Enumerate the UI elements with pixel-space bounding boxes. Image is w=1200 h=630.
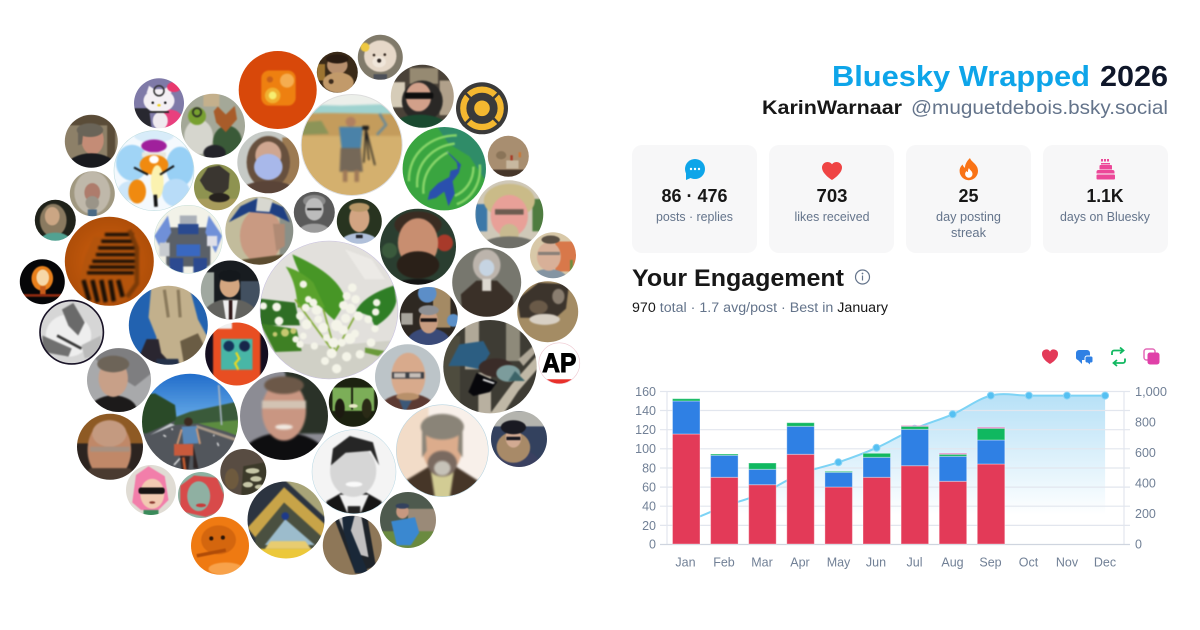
bar: May: [825, 471, 852, 544]
stats cards: [632, 145, 1168, 253]
month labels: Apr: [790, 556, 810, 570]
avatar: cat nose selfie: [316, 52, 358, 93]
avatar: man in kilt with tripod: [300, 94, 403, 196]
left axis labels: 60: [642, 480, 656, 494]
avatar: black and white bird: [39, 300, 104, 365]
month labels: [675, 556, 1116, 570]
avatar: pink-haired cartoon: [126, 465, 176, 515]
card: posts and replies: posts · replies: [656, 210, 733, 224]
avatar: AP logo: [535, 339, 584, 390]
card: likes received: 703: [816, 186, 848, 206]
avatar: crowned fox: [114, 130, 194, 211]
card: likes received: [769, 145, 894, 253]
avatar: man with orange bookshelf: [530, 232, 576, 278]
month labels: Dec: [1094, 556, 1116, 570]
bar: Sep: [977, 427, 1005, 544]
avatar: man with grey sky: [87, 348, 151, 412]
avatar: man with blue shirt in garden: [374, 486, 442, 554]
month labels: Oct: [1019, 556, 1039, 570]
right axis labels: 600: [1135, 446, 1156, 460]
heading: Your Engagement: Your Engagement: [632, 265, 844, 292]
card: day posting streak: 25: [958, 186, 978, 206]
right axis labels: 400: [1135, 477, 1156, 491]
avatar: woman with black glasses: [390, 64, 454, 128]
avatar: AP logo: AP: [542, 348, 576, 378]
handle: @muguetdebois.bsky.social: [911, 97, 1168, 119]
card: days on Bluesky: [1043, 145, 1168, 253]
avatar: curly-haired man: [475, 180, 544, 248]
avatar: black and white man in suit: [304, 421, 404, 522]
avatar: blue robot: [154, 205, 222, 274]
avatar: bearded man in tweed: [387, 396, 498, 506]
title year: 2026: [1100, 61, 1168, 93]
card: days on Bluesky: days on Bluesky: [1060, 210, 1151, 224]
card: days on Bluesky: 1.1K: [1086, 186, 1124, 206]
avatar: fantail bird: [194, 164, 240, 210]
bar: Aug: [939, 453, 967, 544]
avatar: explosion: [20, 259, 65, 304]
right axis labels: 1,000: [1135, 385, 1167, 399]
month labels: Jun: [866, 556, 886, 570]
avatar: orange cat: [191, 516, 249, 575]
stacked bars: [672, 399, 1005, 544]
avatar: woman on bike: [142, 374, 238, 470]
avatar: long-haired man: [70, 171, 115, 216]
avatar: dark tie: [317, 510, 388, 581]
icon: quotes: [1144, 349, 1160, 364]
display name: KarinWarnaar: [762, 98, 903, 119]
left axis labels: 40: [642, 500, 656, 514]
month labels: Mar: [751, 556, 773, 570]
card: posts and replies: [632, 145, 757, 253]
left axis labels: 0: [649, 538, 656, 552]
avatar: man in black fleece: [240, 372, 328, 460]
avatar: grayscale woman: [294, 192, 335, 233]
avatar: yellow ring logo: [456, 82, 508, 134]
left axis labels: 100: [635, 442, 656, 456]
month labels: May: [827, 556, 851, 570]
cumulative area: [686, 394, 1105, 544]
bar: Jun: [863, 453, 890, 544]
avatar: bearded man painting: [380, 208, 456, 285]
avatar: grey-haired man: [64, 114, 118, 168]
avatar: pottery glaze: [248, 482, 324, 558]
icon: chat bubble: [685, 159, 705, 180]
left axis labels: 160: [635, 385, 656, 399]
cumulative line: [686, 394, 1105, 521]
card: posts and replies: 86 · 476: [662, 186, 728, 206]
avatar: balding man with glasses: [77, 414, 143, 480]
avatar: brown wall art: [488, 136, 529, 177]
icon: reposts: [1112, 348, 1125, 366]
bar: Feb: [711, 454, 738, 544]
header: title: [762, 61, 1168, 119]
month labels: Feb: [713, 556, 735, 570]
avatar: woman in hat: [485, 405, 553, 482]
month labels: Aug: [941, 556, 964, 570]
avatar: fluffy cat: [511, 275, 584, 348]
avatar: man in light blue shirt: [336, 198, 382, 244]
bar: Jul: [901, 426, 929, 544]
icon: replies: [1076, 350, 1093, 366]
legend icons: [1042, 348, 1160, 366]
avatar: gothic church: [128, 286, 208, 365]
left axis labels: 20: [642, 519, 656, 533]
card: day posting streak: day posting: [936, 210, 1001, 224]
avatar: person in suit and tie: [200, 260, 260, 320]
avatar: orange app icon: [238, 51, 317, 129]
avatar: masked painted figure: [445, 241, 528, 324]
month labels: Jul: [907, 556, 922, 570]
card: likes received: likes received: [794, 210, 870, 224]
combo chart: monthly engagement: [635, 385, 1167, 570]
right axis labels: 800: [1135, 416, 1156, 430]
avatar: pop art portrait: [178, 472, 224, 518]
engagement summary: 970 total · 1.7 avg/post · Best in January: [632, 300, 888, 315]
line points: [835, 392, 1109, 466]
card: day posting streak: [906, 145, 1031, 253]
avatar: bald man with rectangular glasses: [368, 338, 447, 426]
avatar: man with glass orb: [394, 281, 464, 357]
month labels: Sep: [979, 556, 1002, 570]
avatar: green wind map: [402, 127, 486, 210]
bar: Jan: [672, 399, 700, 544]
avatar: orange poster: [205, 322, 268, 386]
icon: birthday cake: [1096, 159, 1115, 180]
icon: info: [856, 270, 870, 284]
bar: Mar: [749, 463, 776, 544]
title text: Bluesky Wrapped: [832, 61, 1090, 93]
right axis labels: 200: [1135, 507, 1156, 521]
left axis labels: [635, 385, 656, 552]
avatar: fluffy white dog: [358, 34, 403, 80]
avatar: tui bird: [440, 316, 540, 416]
right axis labels: [1135, 385, 1167, 552]
left axis labels: 120: [635, 423, 656, 437]
icon: heart: [822, 162, 842, 180]
right axis labels: 0: [1135, 538, 1142, 552]
icon: likes heart: [1042, 349, 1058, 364]
left axis labels: 140: [635, 404, 656, 418]
avatar: muppets: [181, 94, 245, 158]
avatar cloud: [15, 30, 584, 581]
avatar: lily of the valley: [260, 240, 398, 380]
avatar: garden window: [324, 373, 383, 432]
bar: Apr: [787, 423, 814, 544]
avatar: masked woman: [237, 131, 300, 194]
avatar: hello kitty: [134, 78, 184, 128]
icon: flame: [960, 158, 978, 180]
month labels: Nov: [1056, 556, 1079, 570]
left axis labels: 80: [642, 462, 656, 476]
avatar: woman with teal top: [34, 200, 76, 241]
avatar: cat on camouflage: [220, 449, 266, 495]
avatar: man in blue cap: [225, 196, 294, 265]
avatar: orange microphone: [64, 216, 154, 306]
card: day posting streak: streak: [951, 226, 987, 240]
month labels: Jan: [675, 556, 696, 570]
